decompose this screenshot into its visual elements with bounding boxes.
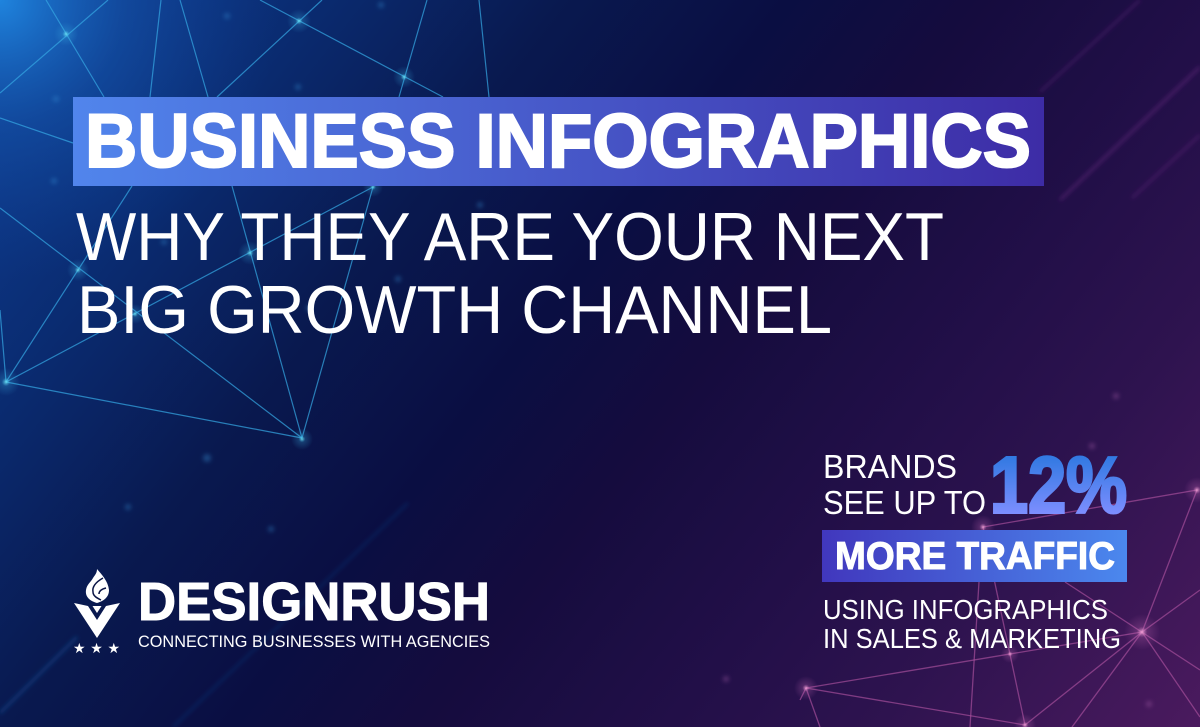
logo wordmark: DESIGNRUSH [138,572,490,632]
purple network nodes and dots [723,393,1200,727]
callout closing text: IN SALES & MARKETING [823,623,1121,654]
statistic callout [822,440,1127,654]
12 percent figure: 12% [990,440,1127,530]
purple streaks top right [1040,0,1200,200]
callout lead text: BRANDS [823,448,957,485]
blue network nodes and dots [0,2,483,532]
DesignRush logo [73,569,490,656]
title banner: BUSINESS INFOGRAPHICS [85,99,1031,184]
purple network lines [800,490,1200,727]
subtitle [76,199,944,348]
callout closing text [823,594,1121,654]
more traffic banner: MORE TRAFFIC [835,535,1115,578]
icon: flame, V shield and stars [73,569,120,656]
callout lead text [823,448,986,521]
logo tagline: CONNECTING BUSINESSES WITH AGENCIES [138,632,490,651]
callout lead text: SEE UP TO [823,484,986,521]
blue network lines [0,0,489,438]
icon: flame, V shield and stars: ★★★ [73,640,120,656]
subtitle: BIG GROWTH CHANNEL [77,272,832,348]
faint blue streaks bottom left [0,503,408,727]
subtitle: WHY THEY ARE YOUR NEXT [76,199,944,275]
callout closing text: USING INFOGRAPHICS [823,594,1108,625]
